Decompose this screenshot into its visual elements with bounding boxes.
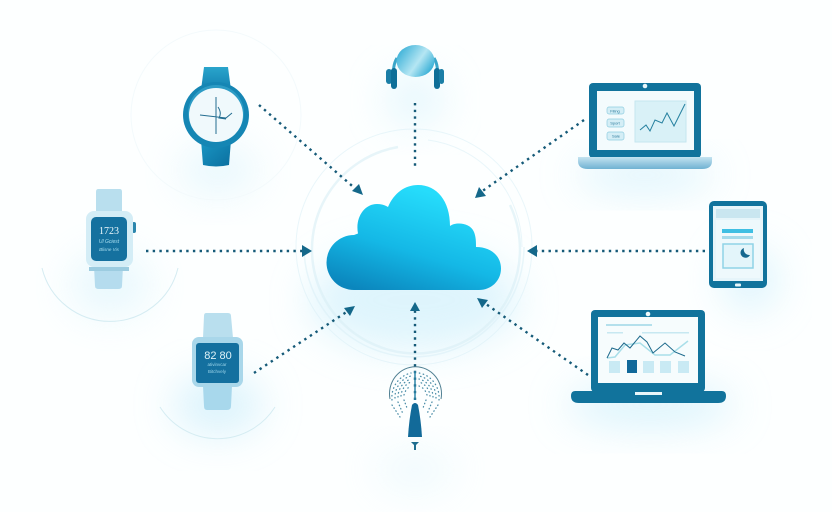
icon: laptop with dashboard <box>571 310 726 403</box>
icon: analog watch <box>131 30 301 200</box>
button labels: Filing <box>610 108 620 114</box>
icon: light smartwatch left <box>42 189 178 321</box>
icon: light smartwatch lower-left: ativinvcar <box>207 362 227 367</box>
rings around cloud <box>296 129 532 365</box>
arrow: top-right laptop to cloud <box>475 120 584 198</box>
arrow: antenna to cloud <box>410 302 420 400</box>
arrow: bottom-right laptop to cloud <box>477 298 588 375</box>
arrow: left watch to cloud <box>146 245 312 257</box>
icon: headset device <box>386 45 444 89</box>
arrow: headset to cloud <box>414 103 416 170</box>
icon: tablet <box>709 201 767 288</box>
icon: laptop with line chart <box>578 83 712 169</box>
icon: light smartwatch lower-left: Bitchvely <box>208 369 227 374</box>
button labels: Sale <box>612 134 621 138</box>
watch readout: 1723 <box>99 226 119 237</box>
icon: central cloud <box>326 185 501 290</box>
arrow: lower-left watch to cloud <box>254 306 355 373</box>
icon: light smartwatch lower-left <box>160 313 275 439</box>
icon: light smartwatch left: Blisne Vis <box>99 247 120 252</box>
watch readout: 82 80 <box>204 350 232 362</box>
arrow: tablet to cloud <box>527 245 705 257</box>
icon: light smartwatch left: Ul Gciest <box>99 239 120 245</box>
arrow: top-left watch to cloud <box>259 105 363 195</box>
button labels <box>607 107 624 140</box>
button labels: Sport <box>610 120 621 126</box>
icon: antenna with signal dome <box>389 367 442 450</box>
